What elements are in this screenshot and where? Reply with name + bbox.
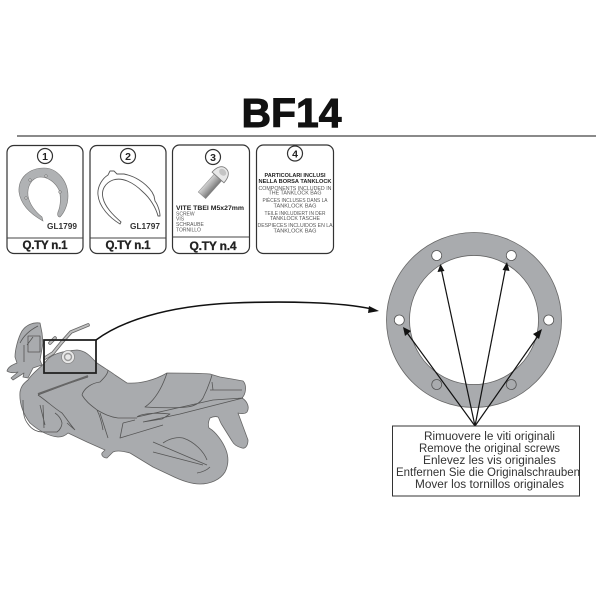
panel: part 4 included: TEILE INKLUDIERT IN DER [264, 211, 326, 217]
panel: part 3 screw: VIS [176, 216, 185, 222]
panel: part 1: Q.TY n.1 [22, 240, 68, 252]
panel: part 4 included: 4 [292, 148, 298, 160]
motorcycle body [20, 350, 248, 484]
panel: part 2: GL1797 [130, 222, 161, 231]
motorcycle fuel cap [62, 350, 74, 364]
ring holes [394, 250, 554, 390]
panel: part 1 [7, 146, 83, 254]
panel: part 4 included: DESPIECES INCLUIDOS EN LA [258, 223, 333, 229]
motorcycle cockpit lines [20, 326, 40, 362]
panel: part 3 screw [172, 145, 250, 254]
icon: frame GL1797 [98, 171, 160, 224]
panel: part 4 included: THE TANKLOCK BAG [268, 190, 322, 196]
curved arrow to detail [96, 302, 379, 340]
panel: part 4 included: TANKLOCK BAG [274, 228, 316, 234]
motorcycle detail lines [23, 370, 243, 473]
panel: part 2: 2 [125, 151, 131, 163]
icon: plate GL1799 [19, 168, 68, 221]
icon: screw [196, 163, 232, 201]
panel: part 3 screw: VITE TBEI M5x27mm [176, 205, 244, 212]
motorcycle illustration [7, 323, 248, 484]
panel: part 3 screw: SCREW [176, 212, 195, 218]
ring detail [386, 232, 562, 407]
panel: part 1: GL1799 [47, 222, 78, 231]
panel: part 4 included [256, 145, 334, 254]
panel: part 4 included: NELLA BORSA TANKLOCK [258, 179, 332, 185]
panel: part 4 included: TANKLOCK TASCHE [270, 216, 321, 222]
panel: part 4 included: COMPONENTS INCLUDED IN [258, 186, 332, 192]
panel: part 4 included: PARTICOLARI INCLUSI [264, 173, 326, 179]
callout: remove screws: Enlevez les vis originales [423, 455, 556, 467]
callout: remove screws: Remove the original screws [419, 443, 560, 455]
panel: part 4 included: TANKLOCK BAG [274, 204, 316, 210]
panel: part 1: 1 [42, 151, 48, 163]
panel: part 3 screw: 3 [210, 152, 216, 164]
panel: part 3 screw: Q.TY n.4 [190, 239, 237, 253]
callout: remove screws: Entfernen Sie die Originalschrauben [396, 467, 580, 479]
callout: remove screws [392, 426, 580, 496]
callout: remove screws: Rimuovere le viti originali [424, 431, 555, 443]
motorcycle fairing and mirror [7, 323, 43, 380]
detail box on tank [44, 340, 96, 373]
panel: part 4 included: PIÈCES INCLUSES DANS LA [262, 197, 328, 204]
panel: part 2: Q.TY n.1 [106, 240, 151, 252]
motorcycle handlebar [45, 325, 88, 358]
panel: part 3 screw: TORNILLO [176, 228, 201, 234]
callout: remove screws: Mover los tornillos originales [415, 479, 564, 491]
arrows to screws [403, 262, 542, 426]
title: BF14 [242, 90, 342, 136]
panel: part 3 screw: SCHRAUBE [176, 222, 204, 228]
panel: part 2 [90, 146, 166, 254]
